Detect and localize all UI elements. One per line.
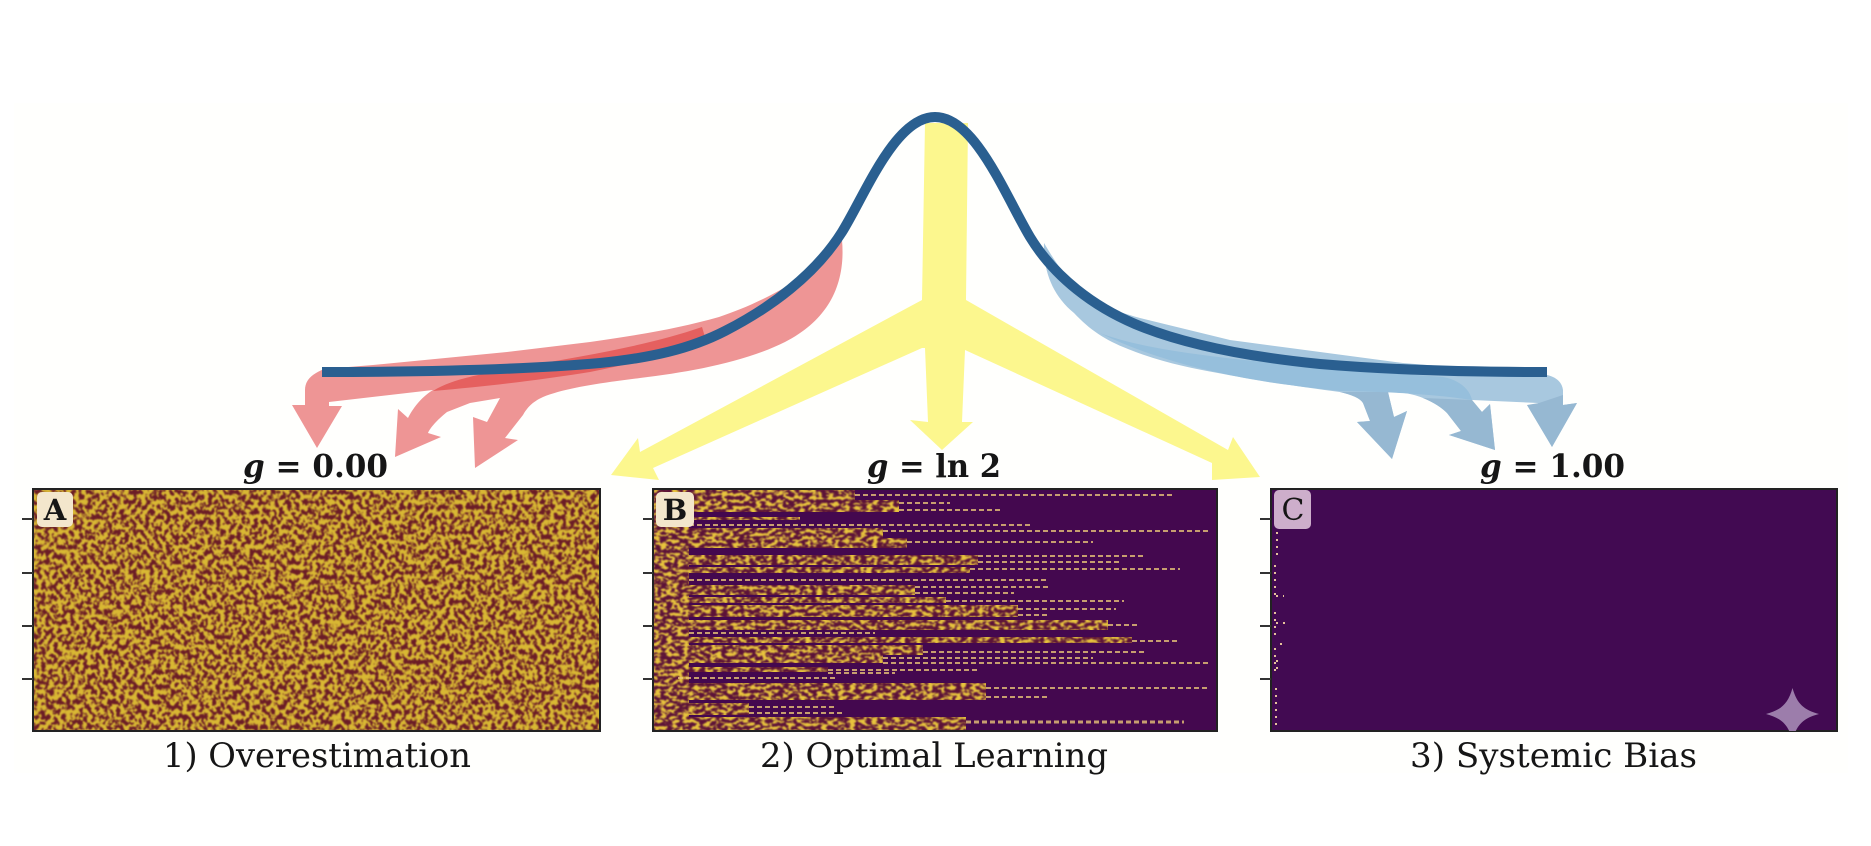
icon: sparkle bbox=[1766, 688, 1819, 731]
badge C bbox=[1274, 490, 1311, 529]
caption 1: 1) Overestimation bbox=[163, 736, 471, 776]
label: g = 0.00: g = 0.00 bbox=[243, 447, 388, 485]
panel A: overestimation raster bbox=[22, 489, 600, 731]
bell curve bbox=[322, 117, 1547, 372]
caption 3: 3) Systemic Bias bbox=[1410, 736, 1697, 776]
badge A bbox=[37, 492, 73, 527]
badge B bbox=[656, 492, 694, 527]
badge B: B bbox=[663, 493, 687, 527]
badge A: A bbox=[43, 493, 67, 527]
red arrows: overestimation flow bbox=[292, 240, 843, 468]
panel B: optimal learning raster bbox=[643, 489, 1217, 731]
caption 2: 2) Optimal Learning bbox=[760, 736, 1108, 776]
yellow arrows: optimal flow bbox=[611, 123, 1260, 480]
panel C: systemic bias raster bbox=[1260, 489, 1837, 740]
background panel bbox=[14, 103, 1848, 773]
blue arrows: systemic bias flow bbox=[1044, 243, 1577, 459]
label: g = ln 2: g = ln 2 bbox=[867, 447, 1001, 485]
badge C: C bbox=[1282, 493, 1304, 528]
label: g = 1.00: g = 1.00 bbox=[1480, 447, 1625, 485]
